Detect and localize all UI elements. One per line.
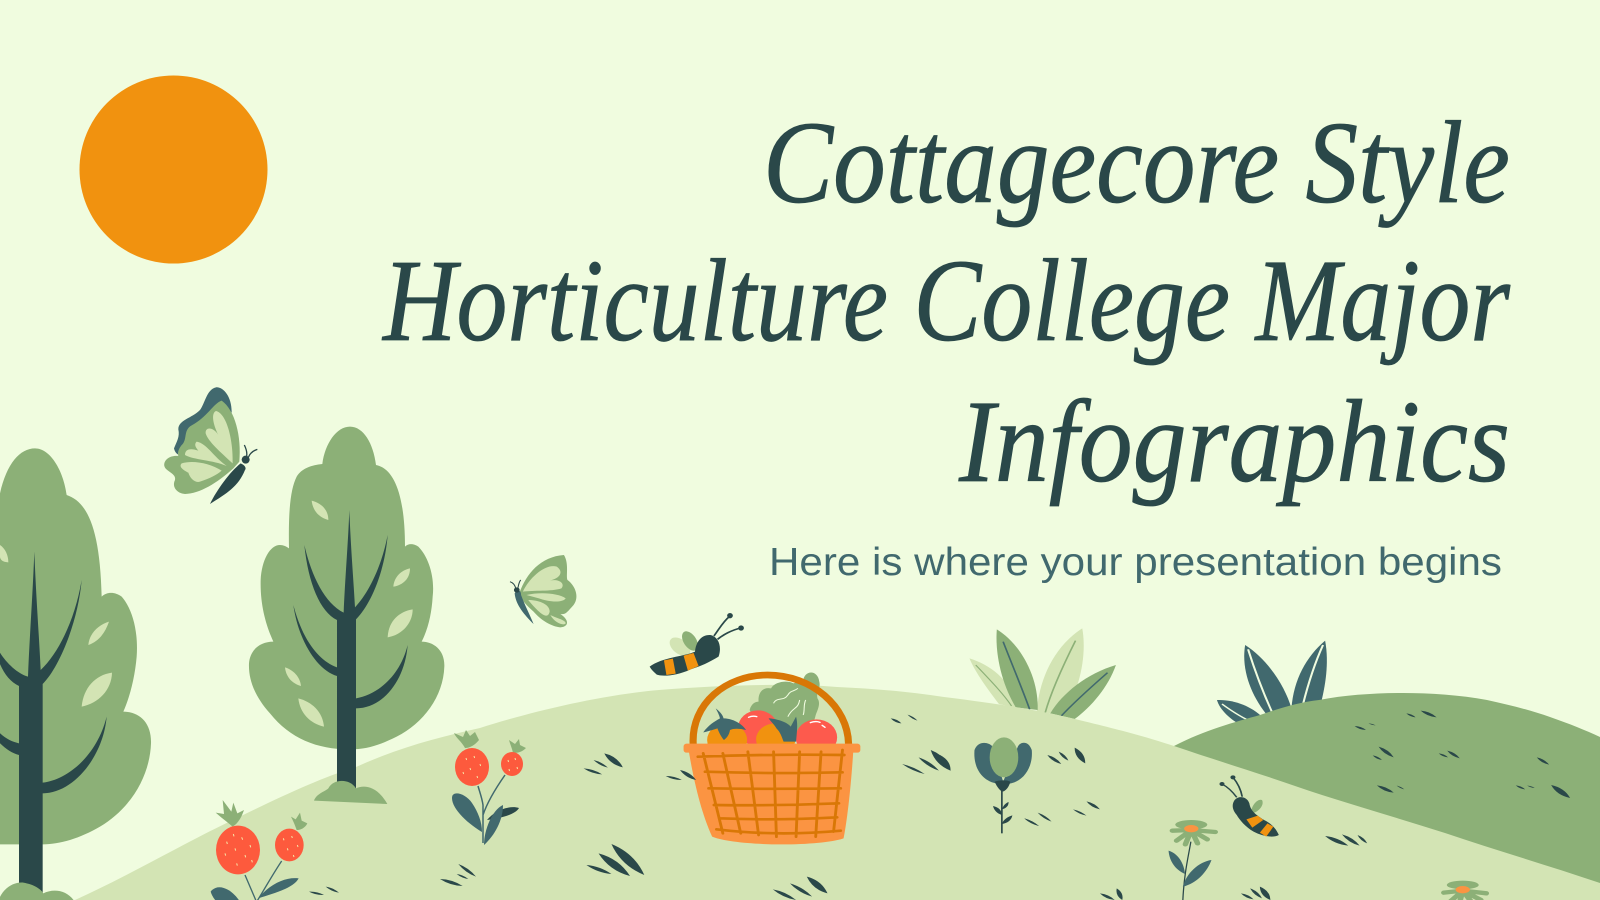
title: Infographics <box>958 376 1510 507</box>
flower: daisy bottom right <box>1444 881 1486 900</box>
strawberry plant: bottom left <box>211 800 307 900</box>
title: Cottagecore Style <box>763 97 1510 228</box>
handle <box>693 675 849 745</box>
basket rim <box>684 744 860 753</box>
title <box>381 97 1511 507</box>
sun <box>80 76 268 264</box>
plant: teal leaves <box>1217 641 1327 726</box>
flower: daisy <box>1169 820 1215 900</box>
wicker <box>698 750 844 837</box>
grass tufts <box>309 709 1572 900</box>
hill: light green <box>75 685 1600 900</box>
tree: right <box>249 427 444 804</box>
plant: light green leaves <box>969 628 1116 719</box>
fruit stems <box>703 708 797 742</box>
lettuce <box>750 673 820 735</box>
subtitle: Here is where your presentation begins <box>769 541 1502 584</box>
bee: flying near basket <box>650 613 744 676</box>
tree: left <box>0 448 151 900</box>
butterfly: large <box>164 387 257 504</box>
basket body <box>689 752 853 844</box>
hill: dark green <box>1174 693 1600 900</box>
fruit <box>738 710 778 746</box>
bee: on hill <box>1219 775 1279 837</box>
butterfly: small <box>510 555 576 627</box>
flower: teal tulip <box>974 737 1032 833</box>
strawberry plant: centre left <box>452 730 526 845</box>
picnic basket with fruit <box>684 673 860 844</box>
